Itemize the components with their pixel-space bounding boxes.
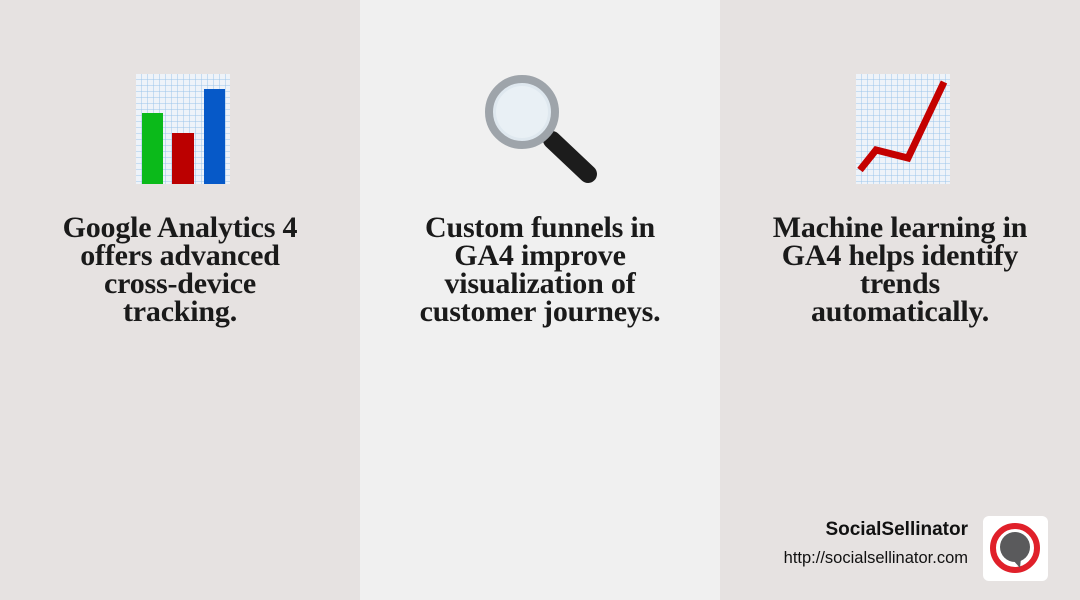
heading: left: offers advanced [80, 239, 280, 272]
heading: right: trends [860, 267, 940, 300]
heading: right [773, 211, 1027, 328]
panel: right [720, 0, 1080, 600]
icon: bar chart [136, 74, 230, 184]
logo [983, 516, 1048, 581]
heading: middle: customer journeys. [420, 295, 660, 328]
heading: right: GA4 helps identify [782, 239, 1018, 272]
heading: middle: GA4 improve [454, 239, 626, 272]
heading: middle: Custom funnels in [425, 211, 655, 244]
icon: trend chart [856, 74, 950, 184]
brand text: http://socialsellinator.com [784, 549, 968, 567]
brand text: SocialSellinator [825, 519, 968, 540]
heading: left: tracking. [123, 295, 237, 328]
heading: right: Machine learning in [773, 211, 1027, 244]
heading: right: automatically. [811, 295, 989, 328]
panel: middle [360, 0, 720, 600]
panel: left [0, 0, 360, 600]
heading: left: cross-device [104, 267, 256, 300]
heading: middle [420, 211, 660, 328]
icon: magnifying glass [485, 75, 597, 183]
heading: left [63, 211, 297, 328]
heading: left: Google Analytics 4 [63, 211, 297, 244]
brand text [784, 519, 968, 567]
heading: middle: visualization of [444, 267, 635, 300]
